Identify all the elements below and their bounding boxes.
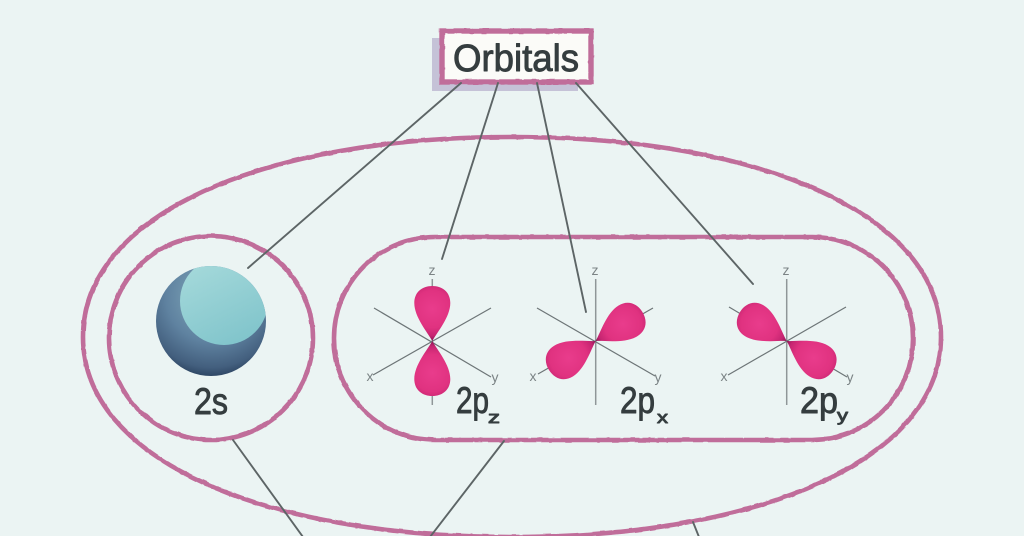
2py orbital bbox=[720, 262, 854, 425]
axis labels: 2pz: x bbox=[366, 368, 374, 384]
axis labels: 2pz: y bbox=[492, 369, 498, 385]
axes: 2pz bbox=[373, 279, 491, 405]
enclosure: 2s orbital bbox=[109, 236, 313, 440]
axis labels: 2py bbox=[720, 262, 854, 385]
axis labels: 2pz: z bbox=[428, 262, 436, 278]
label: 2px: 2p bbox=[620, 380, 655, 421]
label: 2py: 2p bbox=[800, 380, 838, 421]
axis labels: 2px: x bbox=[530, 368, 536, 384]
label: 2px: x bbox=[657, 408, 669, 427]
lobes: 2pz bbox=[414, 286, 450, 396]
axis labels: 2px: z bbox=[592, 262, 598, 278]
axis labels: 2py: z bbox=[782, 262, 790, 278]
axis labels: 2px bbox=[530, 262, 662, 385]
icon: 2s sphere bbox=[156, 257, 268, 376]
infographic: orbitals diagram bbox=[80, 28, 944, 536]
lobes: 2py bbox=[731, 297, 843, 385]
label: 2s: 2s bbox=[194, 381, 228, 422]
2pz orbital bbox=[366, 262, 500, 427]
enclosure: 2p orbitals bbox=[334, 237, 913, 440]
label: 2pz: z bbox=[488, 408, 500, 427]
outer enclosure: shell grouping bbox=[83, 137, 941, 536]
2s orbital bbox=[156, 266, 266, 415]
title text: Orbitals bbox=[453, 38, 579, 80]
axes: 2py bbox=[728, 279, 847, 405]
lobes: 2px bbox=[540, 297, 652, 385]
axis labels: 2py: y bbox=[846, 369, 854, 385]
2px orbital bbox=[530, 262, 669, 427]
label: 2py: y bbox=[837, 406, 849, 425]
axes: 2px bbox=[537, 279, 655, 405]
axis labels: 2pz bbox=[366, 262, 498, 385]
connector lines bbox=[233, 83, 753, 536]
axis labels: 2py: x bbox=[720, 368, 728, 384]
axis labels: 2px: y bbox=[654, 369, 662, 385]
title box bbox=[432, 31, 591, 91]
label: 2pz: 2p bbox=[456, 380, 489, 421]
